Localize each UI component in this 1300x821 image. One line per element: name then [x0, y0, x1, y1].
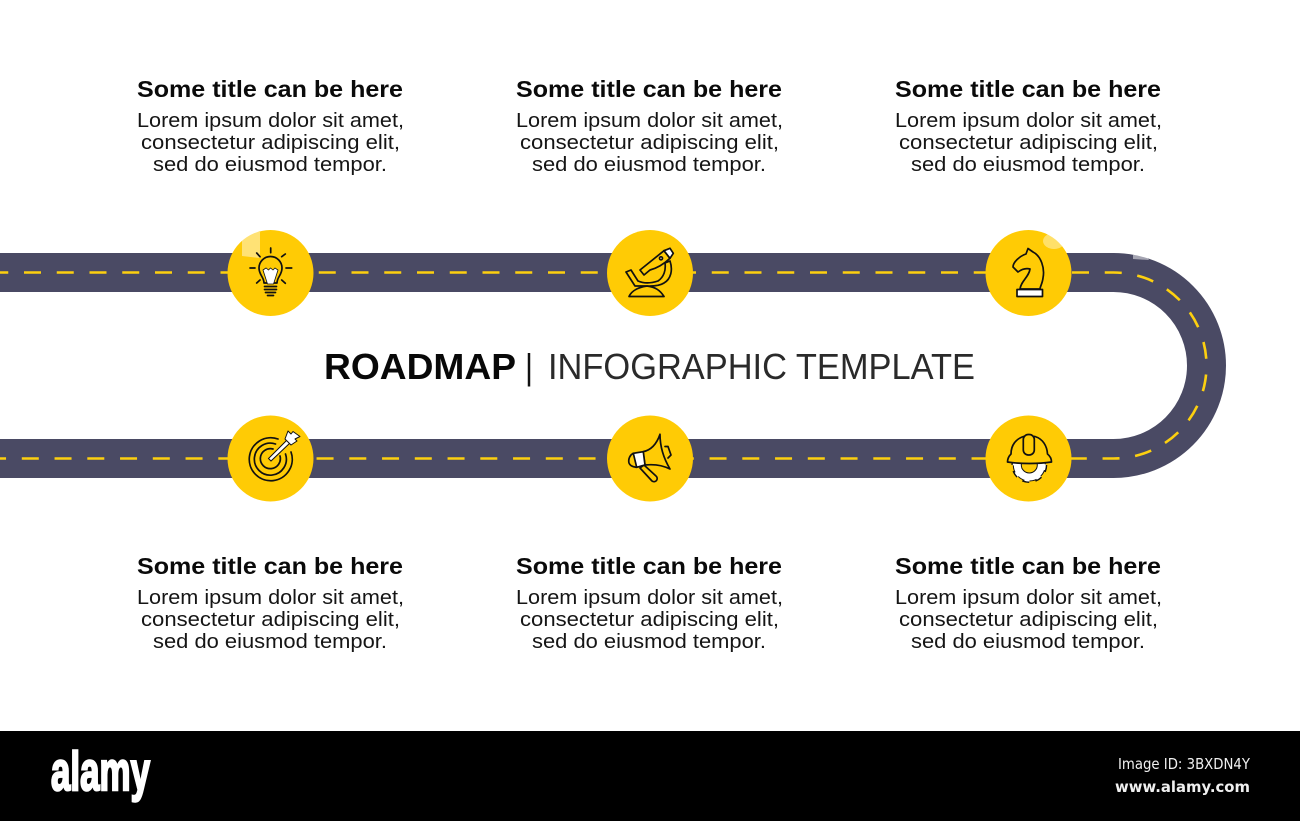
- road with lane markings: [0, 272, 1206, 458]
- website: www.alamy.com: [1115, 778, 1250, 796]
- text block: top centre: consectetur adipiscing elit,: [520, 132, 779, 154]
- image id: Image ID: 3BXDN4Y: [1118, 755, 1251, 773]
- text block: top centre: [516, 76, 783, 176]
- icon: light bulb badge: [228, 230, 314, 316]
- icon: target with dart badge: [228, 416, 314, 502]
- text block: top centre: Some title can be here: [516, 76, 782, 102]
- text block: bottom left: Lorem ipsum dolor sit amet,: [137, 587, 404, 609]
- text block: bottom left: [137, 553, 404, 653]
- text block: top right: sed do eiusmod tempor.: [911, 154, 1145, 176]
- text block: bottom left: sed do eiusmod tempor.: [153, 631, 387, 653]
- text block: bottom centre: sed do eiusmod tempor.: [532, 631, 766, 653]
- text block: top centre: sed do eiusmod tempor.: [532, 154, 766, 176]
- text block: top right: consectetur adipiscing elit,: [899, 132, 1158, 154]
- footer band: [0, 731, 1300, 821]
- text block: bottom centre: Some title can be here: [516, 553, 782, 579]
- text block: bottom left: Some title can be here: [137, 553, 403, 579]
- icon: hard hat and gear badge: [986, 416, 1072, 502]
- main heading: [324, 346, 975, 387]
- text block: top left: sed do eiusmod tempor.: [153, 154, 387, 176]
- text block: bottom left: consectetur adipiscing elit,: [141, 609, 400, 631]
- text block: bottom right: [895, 553, 1162, 653]
- icon: chess knight badge: [986, 230, 1072, 316]
- text block: bottom right: sed do eiusmod tempor.: [911, 631, 1145, 653]
- text block: bottom centre: [516, 553, 783, 653]
- text block: top right: Lorem ipsum dolor sit amet,: [895, 110, 1162, 132]
- icon: microscope badge: [607, 230, 693, 316]
- text block: bottom centre: consectetur adipiscing elit,: [520, 609, 779, 631]
- text block: bottom right: consectetur adipiscing elit,: [899, 609, 1158, 631]
- text block: top left: Lorem ipsum dolor sit amet,: [137, 110, 404, 132]
- main heading: ROADMAP: [324, 346, 516, 387]
- text block: top left: consectetur adipiscing elit,: [141, 132, 400, 154]
- logo: alamy: alamy: [51, 740, 150, 802]
- text block: top centre: Lorem ipsum dolor sit amet,: [516, 110, 783, 132]
- icon: megaphone badge: [607, 416, 693, 502]
- text block: bottom right: Lorem ipsum dolor sit amet,: [895, 587, 1162, 609]
- text block: bottom right: Some title can be here: [895, 553, 1161, 579]
- text block: top right: [895, 76, 1162, 176]
- text block: bottom centre: Lorem ipsum dolor sit amet,: [516, 587, 783, 609]
- text block: top left: Some title can be here: [137, 76, 403, 102]
- main heading: |: [525, 346, 533, 387]
- text block: top right: Some title can be here: [895, 76, 1161, 102]
- main heading: INFOGRAPHIC TEMPLATE: [548, 346, 975, 387]
- text block: top left: [137, 76, 404, 176]
